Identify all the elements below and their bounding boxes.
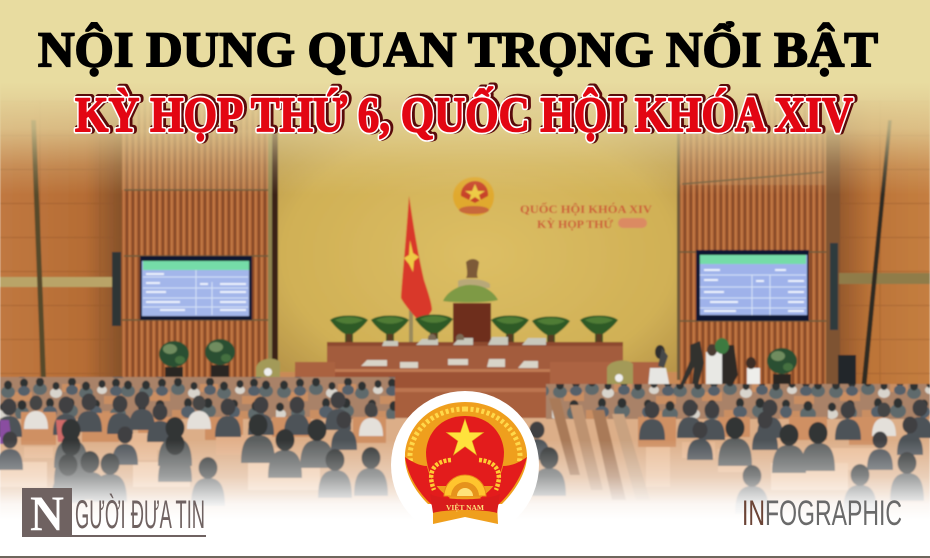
floor speaker <box>838 355 856 397</box>
emblem red field <box>426 416 504 486</box>
bottom fade overlay <box>0 440 930 520</box>
wall lettering: QUỐC HỘI KHÓA XIV <box>520 201 653 216</box>
wall lettering: KỲ HỌP THỨ <box>537 217 614 231</box>
right screen <box>696 250 809 321</box>
wall emblem <box>453 177 494 216</box>
emblem wheat <box>431 460 499 490</box>
wall lettering <box>520 201 653 231</box>
logo: Người Đưa Tin <box>22 485 206 541</box>
left screen <box>140 256 252 320</box>
white circle behind emblem <box>391 391 539 539</box>
left wood panel <box>122 100 280 385</box>
emblem banner <box>433 502 498 524</box>
camera crew <box>648 338 760 390</box>
emblem motto: VIỆT NAM <box>446 503 484 512</box>
left wall <box>0 100 122 390</box>
national emblem <box>405 402 527 524</box>
top fade overlay <box>0 0 930 195</box>
title: NỘI DUNG QUAN TRỌNG NỔI BẬT <box>38 20 878 77</box>
right wood panel <box>677 100 840 390</box>
emblem cog <box>444 475 486 496</box>
emblem gold wreath <box>405 402 527 504</box>
bust <box>458 259 490 288</box>
photo strip at bottom edge <box>0 556 930 558</box>
presidium table <box>295 334 660 388</box>
distant delegates right <box>546 384 930 419</box>
infographic: GƯỜI ĐƯA TIN <box>75 492 205 537</box>
podium <box>453 303 491 347</box>
stage plants <box>330 314 618 343</box>
seat backs <box>0 412 887 490</box>
distant delegates left <box>0 377 395 419</box>
stage flower boxes <box>256 359 633 390</box>
emblem side ribbons <box>405 457 450 505</box>
logo: Người Đưa Tin: N <box>30 485 64 541</box>
flower arrangement <box>443 285 498 302</box>
panel plants <box>159 339 797 386</box>
centre wall <box>278 110 680 372</box>
flag <box>401 196 432 342</box>
right wall <box>839 100 930 390</box>
emblem star <box>446 419 484 455</box>
delegates foreground <box>0 392 930 514</box>
floor behind delegates <box>0 390 930 558</box>
left speaker column <box>112 252 121 326</box>
right speaker column <box>830 243 838 330</box>
desk rows <box>549 398 650 500</box>
